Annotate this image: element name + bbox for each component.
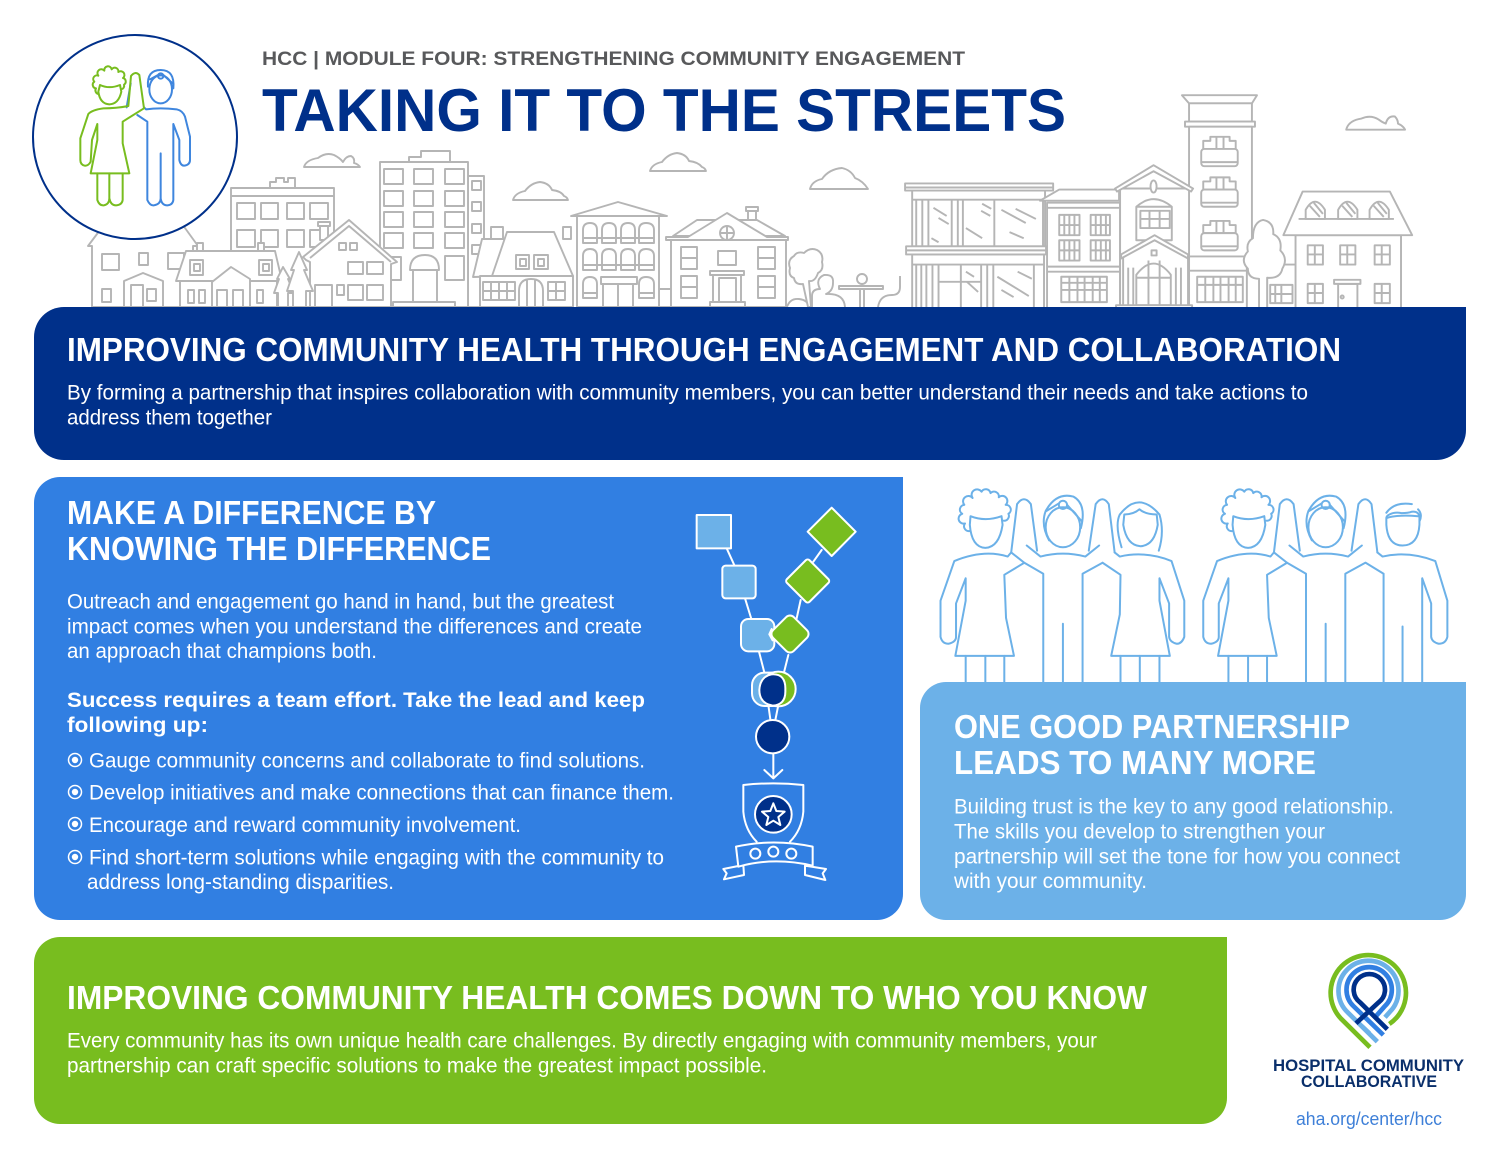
body text [67,1030,1097,1078]
mansard house [473,227,573,307]
panel: who you know [34,937,1227,1124]
heading: LEADS TO MANY MORE [954,744,1316,781]
body text: Building trust is the key to any good relationship. [954,796,1394,818]
mansard house right [1283,192,1412,310]
heading: IMPROVING COMMUNITY HEALTH COMES DOWN TO WHO YOU KNOW [67,979,1148,1016]
logo wordmark: HOSPITAL COMMUNITY [1273,1056,1465,1075]
street trees and café table [787,249,900,307]
modern glass building [905,183,1053,310]
heading [67,494,491,567]
logo mark [1331,955,1406,1047]
panel: improving community health [34,307,1466,460]
tower block [380,151,484,307]
bullet list: Develop initiatives and make connections that can finance them. [89,782,674,804]
heading: IMPROVING COMMUNITY HEALTH THROUGH ENGAGEMENT AND COLLABORATION [67,331,1341,368]
townhouse [1040,190,1120,310]
round-window house [666,207,788,307]
logo: hospital community collaborative [1273,955,1465,1129]
title: TAKING IT TO THE STREETS [262,77,1066,144]
gabled house [303,220,397,307]
blue figure [127,70,190,205]
website link: aha.org/center/hcc [1296,1108,1442,1129]
green figure [80,66,144,205]
cityscape illustration [88,95,1412,310]
clock tower [1182,95,1257,310]
heading: KNOWING THE DIFFERENCE [67,530,491,567]
clouds [304,153,868,200]
arched-window building [571,202,671,307]
intro text: an approach that champions both. [67,640,377,663]
body text: Every community has its own unique health care challenges. By directly engaging with community members, your [67,1030,1097,1052]
heading: ONE GOOD PARTNERSHIP [954,708,1350,745]
body text: partnership can craft specific solutions to make the greatest impact possible. [67,1054,767,1078]
body text: address them together [67,406,272,430]
icon: two people high-five in circle [33,35,237,239]
bold lead-in [67,689,645,737]
body text: partnership will set the tone for how you connect [954,846,1400,868]
cottage with dormers [176,243,282,307]
heading: MAKE A DIFFERENCE BY [67,494,436,531]
diagram: paths converging into a shield [697,508,856,880]
cloud right [1346,116,1405,130]
round tree [1244,220,1285,310]
bold lead-in: following up: [67,714,208,737]
bullet list: Gauge community concerns and collaborate to find solutions. [89,750,645,772]
bold lead-in: Success requires a team effort. Take the lead and keep [67,689,645,712]
logo wordmark [1273,1056,1465,1091]
intro text: Outreach and engagement go hand in hand, but the greatest [67,590,614,614]
left house [88,210,198,307]
logo wordmark: COLLABORATIVE [1301,1072,1437,1091]
bullet list: Encourage and reward community involvement. [89,814,521,837]
gabled civic building [1115,165,1193,310]
illustration: row of people with raised arms [941,489,1447,689]
eyebrow: HCC | MODULE FOUR: STRENGTHENING COMMUNITY ENGAGEMENT [262,48,965,70]
bullet list [68,750,674,894]
first group of three [941,489,1184,689]
body text: with your community. [953,870,1147,893]
low connector [1267,265,1298,310]
body text: The skills you develop to strengthen your [954,820,1325,844]
header [262,48,1066,144]
intro text [67,590,642,663]
panel: make a difference [34,477,903,920]
body text [953,796,1400,893]
intro text: impact comes when you understand the differences and create [67,616,642,638]
right-hand streetscape [905,95,1412,310]
bullet list: Find short-term solutions while engaging with the community to [89,846,664,870]
body text: By forming a partnership that inspires collaboration with community members, you can better understand their needs and take actions to [67,382,1308,404]
heading [954,708,1350,781]
apartment block [231,178,334,307]
panel: one good partnership [920,682,1466,920]
second group of three [1203,489,1447,689]
pine trees [274,252,313,307]
bullet list: address long-standing disparities. [87,871,394,894]
body text [67,382,1308,430]
